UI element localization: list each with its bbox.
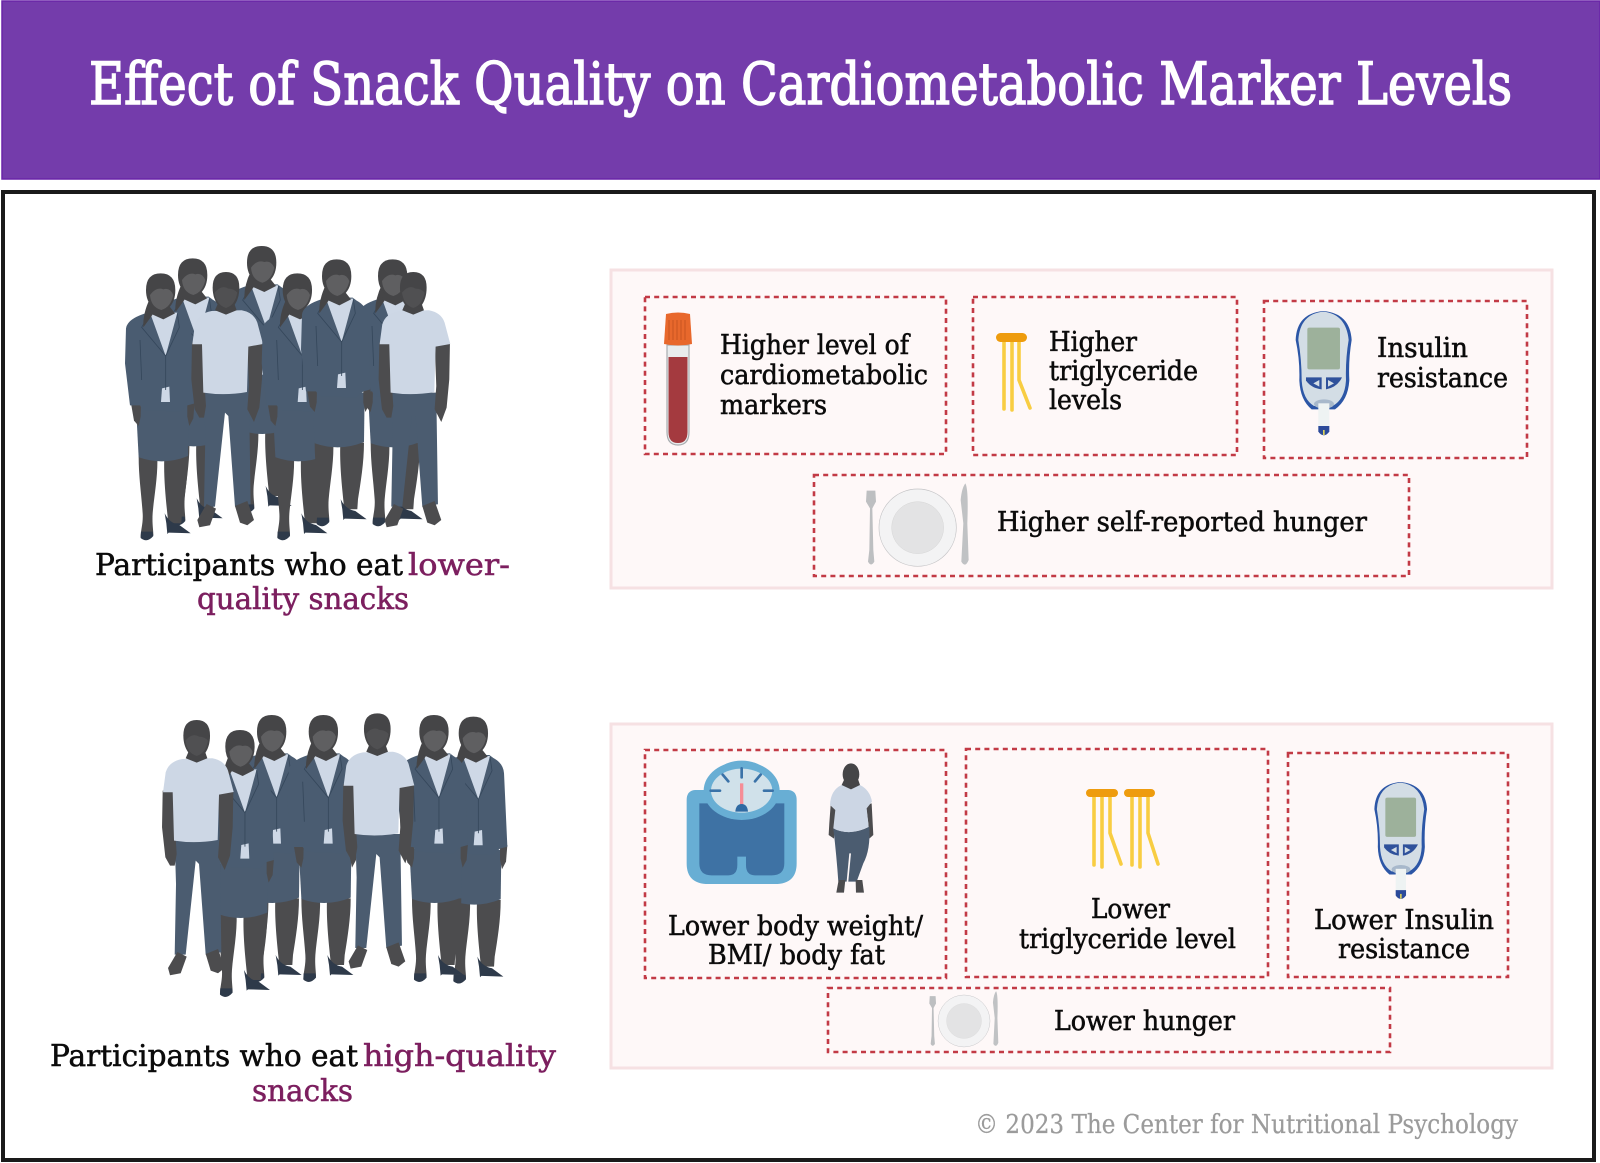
icon: plate and cutlery (929, 991, 998, 1047)
caption: lower-quality snacks: Participants who eat (95, 548, 403, 583)
caption: high-quality snacks: snacks (252, 1074, 353, 1109)
box: triglycerides (973, 297, 1237, 455)
text: insulin resistance: Insulin (1377, 333, 1468, 364)
text: insulin resistance (1377, 333, 1508, 394)
icon: glucose meter (1296, 311, 1352, 435)
text: lower insulin resistance: resistance (1338, 934, 1470, 965)
title banner (2, 1, 1600, 179)
box: lower triglycerides (966, 749, 1268, 977)
illustration: participants eating high-quality snacks (162, 713, 507, 997)
copyright: © 2023 The Center for Nutritional Psychology (975, 1110, 1518, 1140)
icon: blood tube (664, 312, 692, 445)
icon: person (829, 763, 873, 893)
text: higher triglyceride levels: Higher (1049, 327, 1137, 358)
text: higher triglyceride levels: triglyceride (1049, 356, 1198, 387)
text: higher level of cardiometabolic markers: cardiometabolic (720, 360, 928, 391)
text: lower body weight / BMI / body fat: BMI/ body fat (708, 940, 885, 971)
text: higher level of cardiometabolic markers: markers (720, 390, 827, 421)
text: lower body weight / BMI / body fat: Lower body weight/ (668, 911, 924, 942)
icon: plate and cutlery (866, 483, 969, 566)
box: lower insulin resistance (1288, 753, 1508, 977)
icon: glucose meter (1374, 782, 1427, 899)
text: lower body weight / BMI / body fat (668, 911, 924, 971)
box: cardiometabolic markers (645, 297, 946, 454)
box: hunger (814, 475, 1409, 576)
text: lower triglyceride level: triglyceride level (1019, 924, 1236, 955)
illustration: participants eating lower-quality snacks (125, 246, 450, 540)
caption: lower-quality snacks: quality snacks (197, 582, 409, 617)
icon: triglyceride molecules (1086, 789, 1158, 867)
caption: lower-quality snacks (95, 548, 510, 617)
panel: higher-risk outcomes (611, 270, 1552, 588)
panel: lower-risk outcomes (611, 724, 1552, 1068)
text: lower insulin resistance (1314, 905, 1494, 965)
icon: weighing scale (687, 761, 797, 884)
text: higher level of cardiometabolic markers: Higher level of (720, 330, 911, 361)
box: insulin resistance (1264, 301, 1527, 458)
text: higher self-reported hunger: Higher self-reported hunger (997, 507, 1367, 538)
text: insulin resistance: resistance (1377, 363, 1508, 394)
caption: lower-quality snacks: lower- (408, 548, 510, 583)
icon: triglyceride molecule (996, 333, 1030, 410)
text: higher level of cardiometabolic markers (720, 330, 928, 421)
caption: high-quality snacks: high-quality (363, 1039, 556, 1074)
text: higher triglyceride levels: levels (1049, 385, 1122, 416)
caption: high-quality snacks: Participants who eat (50, 1039, 358, 1074)
text: higher triglyceride levels (1049, 327, 1198, 416)
text: lower triglyceride level: Lower (1091, 894, 1170, 925)
text: lower hunger: Lower hunger (1054, 1006, 1235, 1037)
caption: high-quality snacks (50, 1039, 556, 1109)
text: lower insulin resistance: Lower Insulin (1314, 905, 1494, 936)
box: body weight (645, 750, 946, 978)
text: lower triglyceride level (1019, 894, 1236, 955)
box: lower hunger (828, 988, 1390, 1052)
